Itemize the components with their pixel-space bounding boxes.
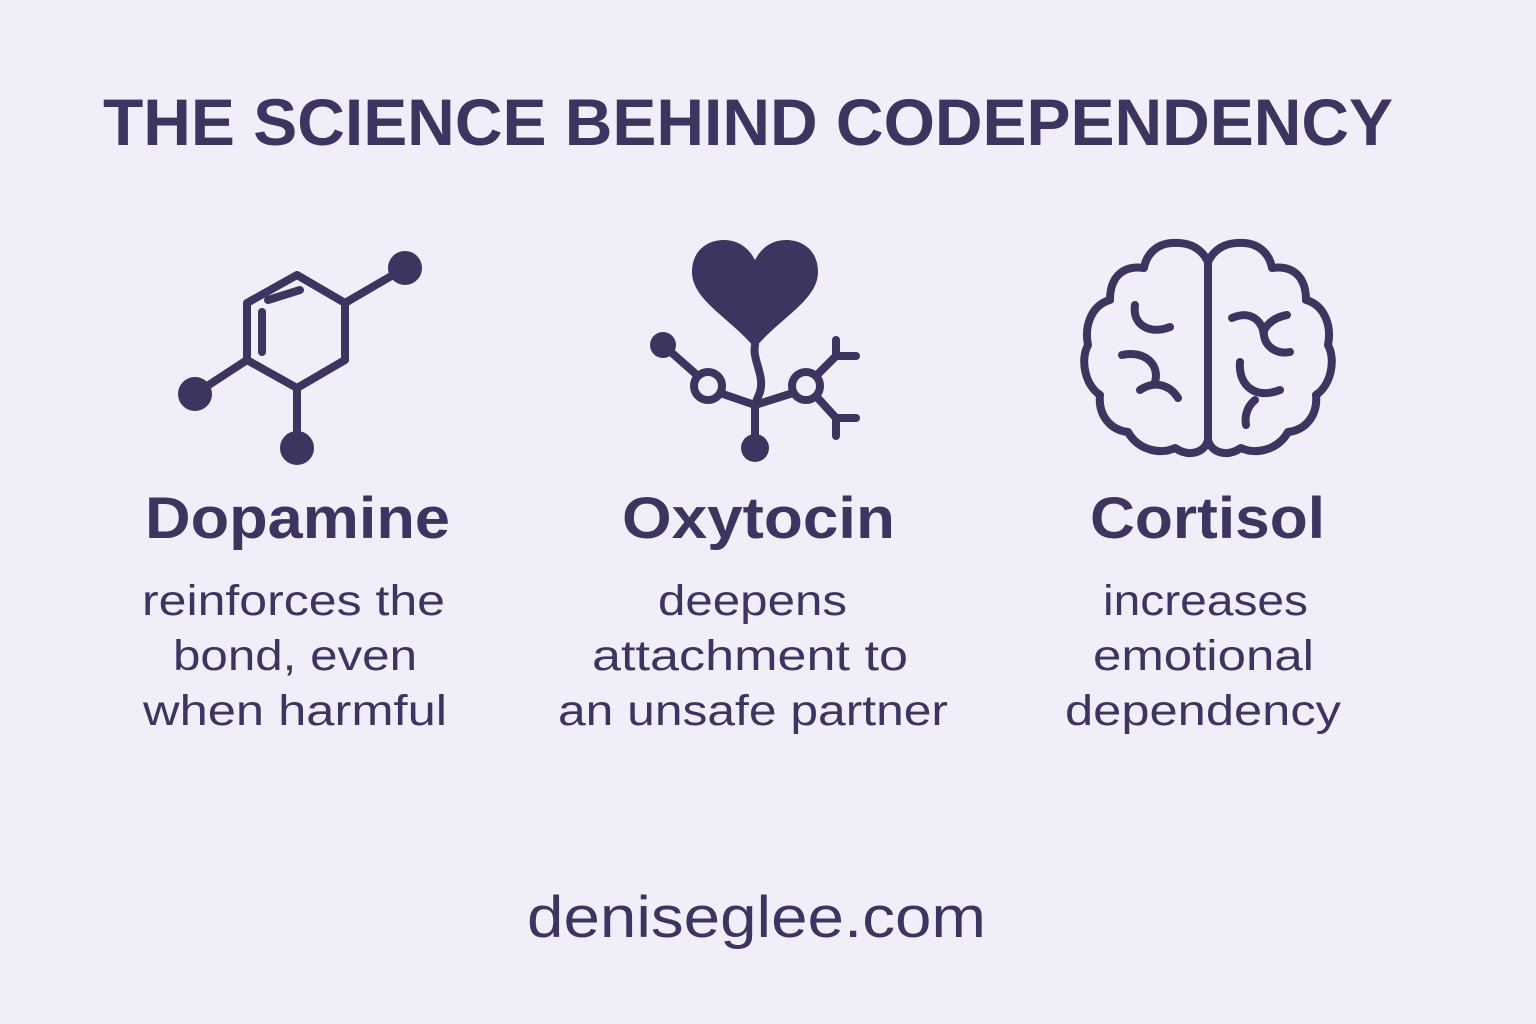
text: dopamine description: when harmful xyxy=(142,687,447,735)
text: dopamine description xyxy=(142,577,447,735)
text: oxytocin description xyxy=(558,577,948,735)
text: oxytocin description: an unsafe partner xyxy=(558,687,948,735)
text: cortisol description: dependency xyxy=(1065,687,1342,735)
icon: dopamine molecule xyxy=(182,255,418,461)
text: cortisol description: emotional xyxy=(1093,632,1314,680)
heading: Cortisol: Cortisol xyxy=(1090,486,1325,551)
text: oxytocin description: attachment to xyxy=(592,632,908,680)
title: THE SCIENCE BEHIND CODEPENDENCY xyxy=(103,85,1393,159)
icon: brain xyxy=(1084,243,1332,453)
heading: Dopamine: Dopamine xyxy=(145,486,450,551)
icon: oxytocin heart molecule xyxy=(650,240,856,462)
footer: website: deniseglee.com xyxy=(527,885,986,950)
heading: Oxytocin: Oxytocin xyxy=(622,486,895,551)
text: cortisol description: increases xyxy=(1103,577,1308,625)
text: dopamine description: bond, even xyxy=(173,632,417,680)
text: dopamine description: reinforces the xyxy=(142,577,445,625)
text: oxytocin description: deepens xyxy=(658,577,847,625)
text: cortisol description xyxy=(1065,577,1342,735)
